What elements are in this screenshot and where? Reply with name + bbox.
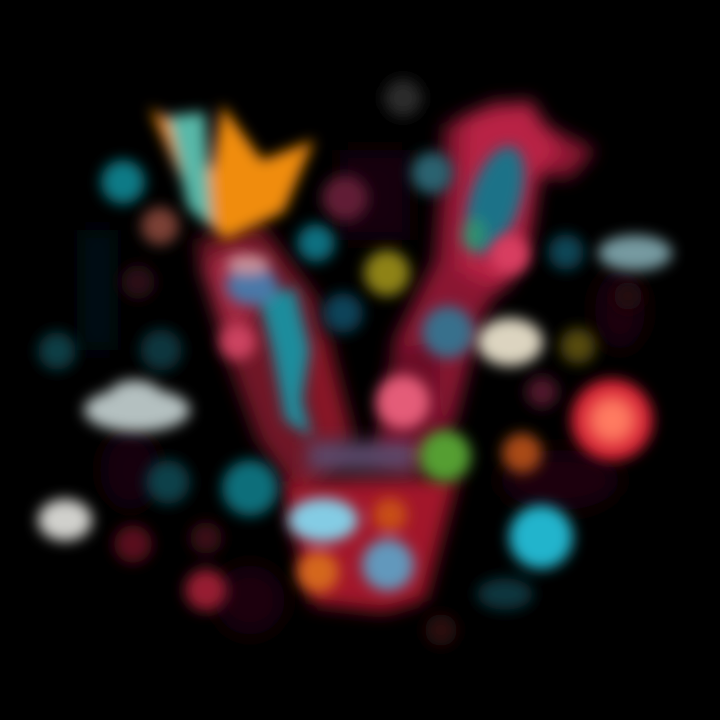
faint dark shapes (85, 150, 645, 635)
pink circle (376, 375, 430, 429)
pink spot on right arm (490, 235, 530, 275)
clouds and white blobs (38, 235, 672, 541)
basket contents (288, 498, 414, 593)
teal and blue dots (38, 152, 584, 610)
glowing red circle (571, 379, 653, 461)
orange crown (150, 105, 314, 240)
teal figure in left arm (226, 254, 312, 438)
oval teal mirror (454, 139, 536, 261)
pale spot on left arm (220, 324, 256, 360)
orange dot (502, 433, 542, 473)
green circle (419, 430, 471, 482)
right red arm (375, 100, 595, 470)
muted dots (114, 79, 642, 646)
basket (282, 442, 458, 612)
left red arm (195, 225, 355, 500)
